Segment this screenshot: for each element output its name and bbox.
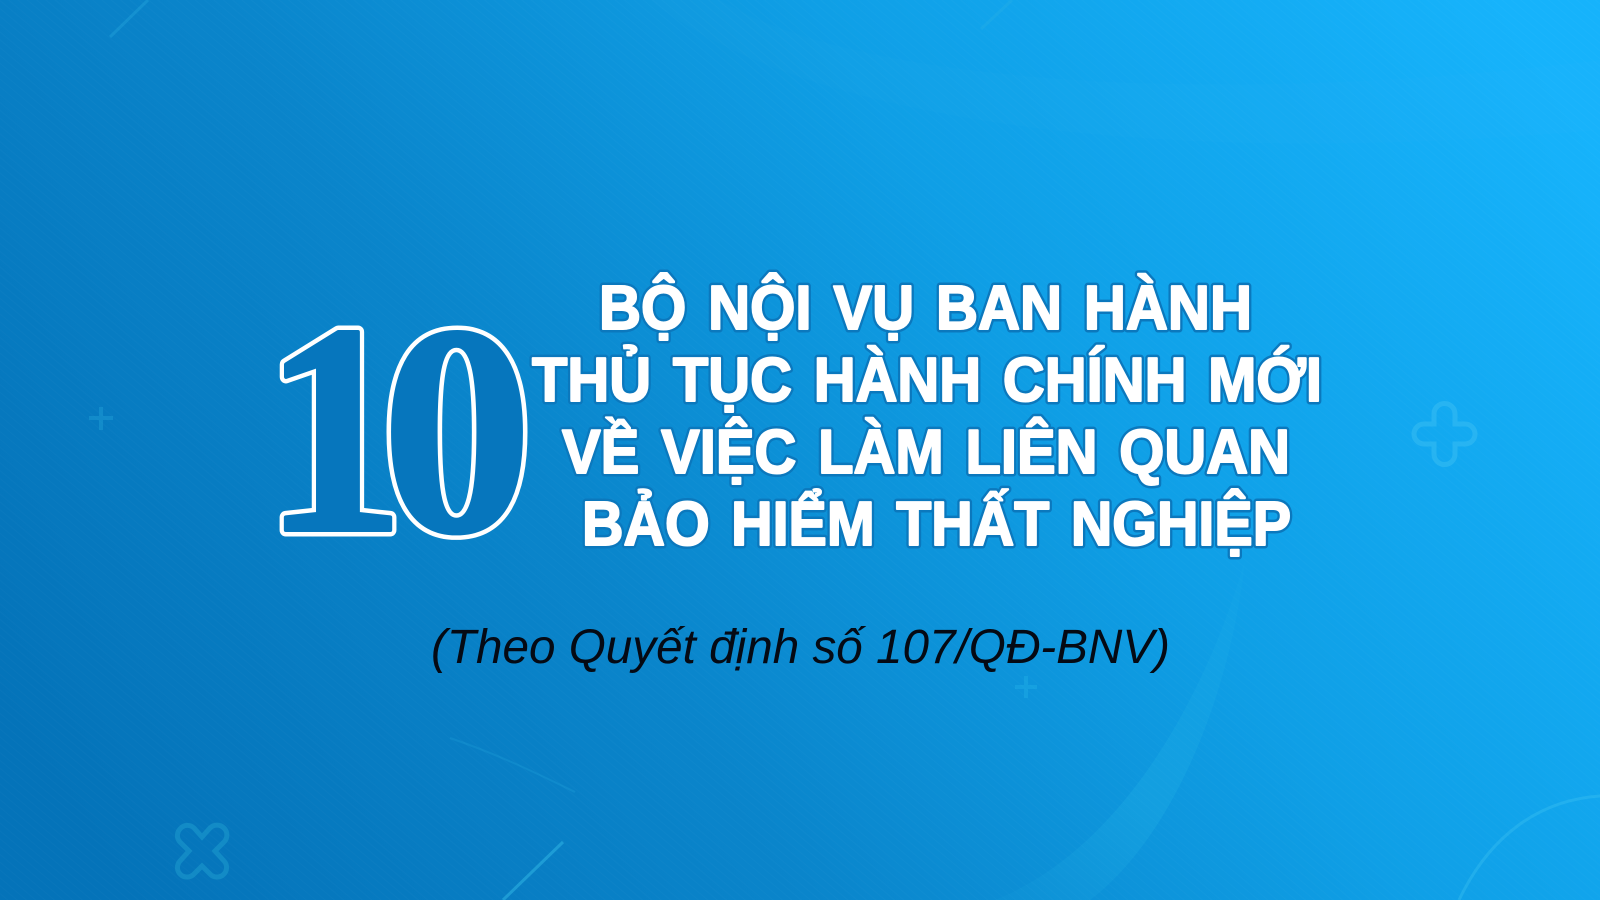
icon: outline cross bottom left	[177, 825, 227, 877]
big number 10	[263, 263, 533, 596]
title: BỘ NỘI VỤ BAN HÀNH	[599, 274, 1252, 343]
title: BẢO HIỂM THẤT NGHIỆP	[582, 490, 1291, 559]
big number 10: 1	[263, 263, 405, 595]
big number 10: 1	[263, 263, 405, 595]
title line 1: BỘ NỘI VỤ BAN HÀNH	[599, 274, 1252, 343]
title line 2: THỦ TỤC HÀNH CHÍNH MỚI	[532, 346, 1322, 415]
big number 10: 0	[381, 264, 533, 596]
icon: small plus left	[89, 407, 113, 430]
title	[532, 274, 1322, 559]
arc bottom right	[1459, 796, 1600, 900]
big number 10: 0	[381, 264, 533, 596]
title line 3: VỀ VIỆC LÀM LIÊN QUAN	[562, 418, 1290, 487]
subtitle: (Theo Quyết định số 107/QĐ-BNV)	[431, 621, 1170, 674]
title: THỦ TỤC HÀNH CHÍNH MỚI	[532, 346, 1322, 415]
icon: outline plus right	[1414, 404, 1475, 464]
title line 4: BẢO HIỂM THẤT NGHIỆP	[582, 490, 1291, 559]
decorative diagonal lines	[110, 0, 1012, 900]
icon: small plus centre	[1015, 676, 1037, 698]
background wave band	[650, 0, 1600, 900]
title: VỀ VIỆC LÀM LIÊN QUAN	[562, 418, 1290, 487]
